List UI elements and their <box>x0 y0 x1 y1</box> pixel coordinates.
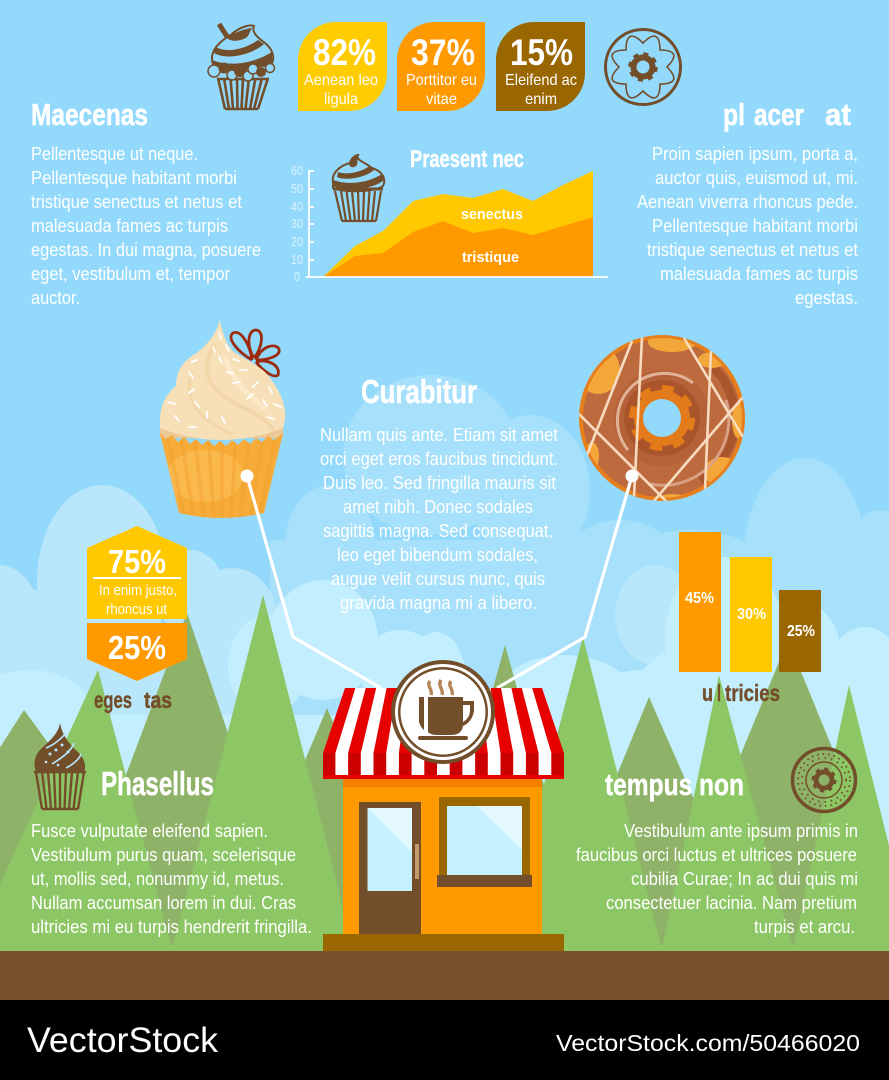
hexagon stat: 75% <box>87 526 187 619</box>
text block: tempus non body: faucibus orci luctus et ultrices posuere <box>576 845 857 865</box>
inner rings <box>614 370 710 466</box>
icon: chart cupcake <box>333 155 384 221</box>
label: ultricies <box>702 680 780 706</box>
orange dough gear <box>634 390 690 446</box>
text block: Curabitur body: sagittis magna. Sed consequat, <box>323 521 553 541</box>
heading: Curabitur: Curabitur <box>361 373 477 410</box>
axis labels <box>291 163 303 284</box>
donut hole <box>643 399 681 437</box>
background: middle clouds <box>0 485 695 840</box>
text block: Phasellus body: Fusce vulputate eleifend sapien. <box>31 821 268 841</box>
stat badge: 37%: Porttitor eu <box>406 72 477 89</box>
label: ultricies: u <box>702 680 713 706</box>
red ribbon loops <box>231 330 279 376</box>
stat badge: 15%: Eleifend ac <box>505 72 577 89</box>
axis labels: 30 <box>291 216 303 231</box>
background: far clouds <box>270 375 889 800</box>
step <box>323 934 564 951</box>
highlight arcs <box>617 373 693 450</box>
stat badge: 82% <box>298 22 387 111</box>
window <box>437 797 532 887</box>
heading: placerat: pl <box>723 97 745 132</box>
glaze drips <box>587 338 742 498</box>
axis labels: 0 <box>294 269 300 284</box>
icon: top donut <box>606 30 680 104</box>
background: near clouds <box>0 557 889 955</box>
awning <box>323 688 564 779</box>
text block: tempus non body: Vestibulum ante ipsum primis in <box>624 821 858 841</box>
illustration: large vanilla cupcake <box>160 320 286 518</box>
text block: Maecenas body: Pellentesque habitant morbi <box>31 168 237 188</box>
icon: coffee cup <box>418 697 474 740</box>
hexagon stat: 25% <box>87 623 187 681</box>
hexagon stat: 75%: In enim justo, <box>99 582 177 599</box>
icon: top cupcake <box>208 24 274 109</box>
icon: steam <box>429 680 452 695</box>
heading: placerat: acer <box>754 97 804 132</box>
sprinkles <box>168 333 281 427</box>
text block: placerat body: auctor quis, euismod ut, mi. <box>655 168 858 188</box>
heading: placerat <box>723 97 851 132</box>
stat badge: 15% <box>496 22 585 111</box>
icon: bottom donut <box>792 748 856 812</box>
text block: Maecenas body: Pellentesque ut neque. <box>31 144 198 164</box>
text block: Curabitur body: amet nibh. Donec sodales <box>343 497 533 517</box>
door <box>359 802 421 934</box>
illustration: large chocolate donut <box>576 332 745 504</box>
frosting swirls <box>189 345 272 434</box>
series: tristique <box>323 217 593 277</box>
label: egestas: eges <box>94 687 132 713</box>
heading: Maecenas: Maecenas <box>31 97 148 132</box>
text block: tempus non body <box>576 821 858 937</box>
bar: 45% <box>679 532 721 672</box>
text block: Maecenas body: eget, vestibulum et, tempor <box>31 264 230 284</box>
text block: Curabitur body: leo eget bibendum sodales, <box>337 545 538 565</box>
shop sign with coffee cup <box>391 660 495 764</box>
hexagon stat: 75%: rhoncus ut <box>106 601 168 618</box>
watermark bar <box>0 1000 889 1080</box>
axis labels: 50 <box>291 181 303 196</box>
axis labels: 40 <box>291 199 303 214</box>
watermark url text: VectorStock.com/50466020 <box>556 1030 860 1056</box>
text block: tempus non body: cubilia Curae; In ac dui quis mi <box>631 869 858 889</box>
bar: 45%: 45% <box>685 590 714 607</box>
label: ultricies: tricies <box>725 680 780 706</box>
bar: 25%: 25% <box>787 623 815 640</box>
stat badge: 82%: ligula <box>324 91 358 108</box>
text block: Maecenas body: tristique senectus et netus et <box>31 192 242 212</box>
heading: tempus non: tempus non <box>605 767 744 802</box>
bar: 25% <box>779 590 821 672</box>
connector: cupcake to shop <box>240 470 381 688</box>
series label: senectus: senectus <box>461 206 523 223</box>
text block: Curabitur body: gravida magna mi a libero. <box>340 593 537 613</box>
ground <box>0 951 889 1000</box>
series label: tristique: tristique <box>462 249 519 266</box>
chart title: Praesent nec <box>410 146 524 173</box>
text block: Phasellus body <box>31 821 312 937</box>
wrapper <box>160 433 283 518</box>
text block: placerat body <box>637 144 858 308</box>
bar: 30% <box>730 557 772 672</box>
stat badge: 37% <box>397 22 485 111</box>
text block: placerat body: egestas. <box>795 288 858 308</box>
text block: Curabitur body <box>320 425 558 613</box>
axis labels: 20 <box>291 234 303 249</box>
heading: Phasellus: Phasellus <box>101 765 214 802</box>
text block: Curabitur body: orci eget eros faucibus tincidunt. <box>320 449 558 469</box>
label: egestas <box>94 687 172 713</box>
series: senectus <box>323 171 593 277</box>
text block: placerat body: malesuada fames ac turpis <box>660 264 858 284</box>
text block: Curabitur body: augue velit cursus nunc, quis <box>331 569 545 589</box>
text block: tempus non body: turpis et arcu. <box>754 917 855 937</box>
text block: Phasellus body: Nullam accumsan lorem in dui. Cras <box>31 893 296 913</box>
frosting <box>160 320 285 440</box>
hexagon stat: 75%: 75% <box>108 543 166 580</box>
text block: placerat body: Proin sapien ipsum, porta a, <box>652 144 858 164</box>
area chart: Praesent nec <box>291 146 608 284</box>
chart axes <box>306 170 608 277</box>
bar chart: ultricies <box>679 532 821 672</box>
watermark logo text: VectorStock <box>27 1021 219 1060</box>
text block: placerat body: Aenean viverra rhoncus pede. <box>637 192 858 212</box>
darker chocolate edge <box>700 366 735 480</box>
label: ultricies: l <box>717 680 721 706</box>
text block: placerat body: Pellentesque habitant morbi <box>652 216 858 236</box>
awning shadow <box>343 779 542 787</box>
stat badge: 37%: vitae <box>426 91 457 108</box>
icing lines <box>579 337 743 502</box>
text block: Phasellus body: ut, mollis sed, nonummy id, metus. <box>31 869 284 889</box>
text block: Maecenas body: malesuada fames ac turpis <box>31 216 228 236</box>
bar: 30%: 30% <box>737 606 766 623</box>
text block: Phasellus body: Vestibulum purus quam, scelerisque <box>31 845 296 865</box>
text block: tempus non body: consectetuer lacinia. Nam pretium <box>606 893 857 913</box>
stat badge: 15%: 15% <box>510 32 573 73</box>
text block: Phasellus body: ultricies mi eu turpis hendrerit fringilla. <box>31 917 312 937</box>
text block: placerat body: tristique senectus et netus et <box>647 240 858 260</box>
text block: Curabitur body: Nullam quis ante. Etiam sit amet <box>320 425 558 445</box>
icon: bottom cupcake <box>34 723 86 809</box>
text block: Curabitur body: Duis leo. Sed fringilla mauris sit <box>323 473 556 493</box>
shop body <box>343 779 542 934</box>
heading: placerat: at <box>825 97 851 132</box>
background: dark pine trees <box>0 613 889 950</box>
frosting skirt <box>160 425 283 438</box>
stat badge: 37%: 37% <box>411 32 475 73</box>
stat badge: 82%: 82% <box>313 32 376 73</box>
text block: Maecenas body: egestas. In dui magna, posuere <box>31 240 261 260</box>
text block: Maecenas body: auctor. <box>31 288 80 308</box>
stat badge: 82%: Aenean leo <box>304 72 378 89</box>
text block: Maecenas body <box>31 144 261 308</box>
stat badge: 15%: enim <box>525 91 557 108</box>
label: egestas: tas <box>144 687 172 713</box>
hexagon stat: 25%: 25% <box>108 629 166 666</box>
illustration: coffee shop <box>323 660 564 951</box>
background: light pine trees <box>0 595 889 951</box>
axis labels: 60 <box>291 163 303 178</box>
connector: donut to shop <box>497 470 638 688</box>
axis labels: 10 <box>291 252 303 267</box>
